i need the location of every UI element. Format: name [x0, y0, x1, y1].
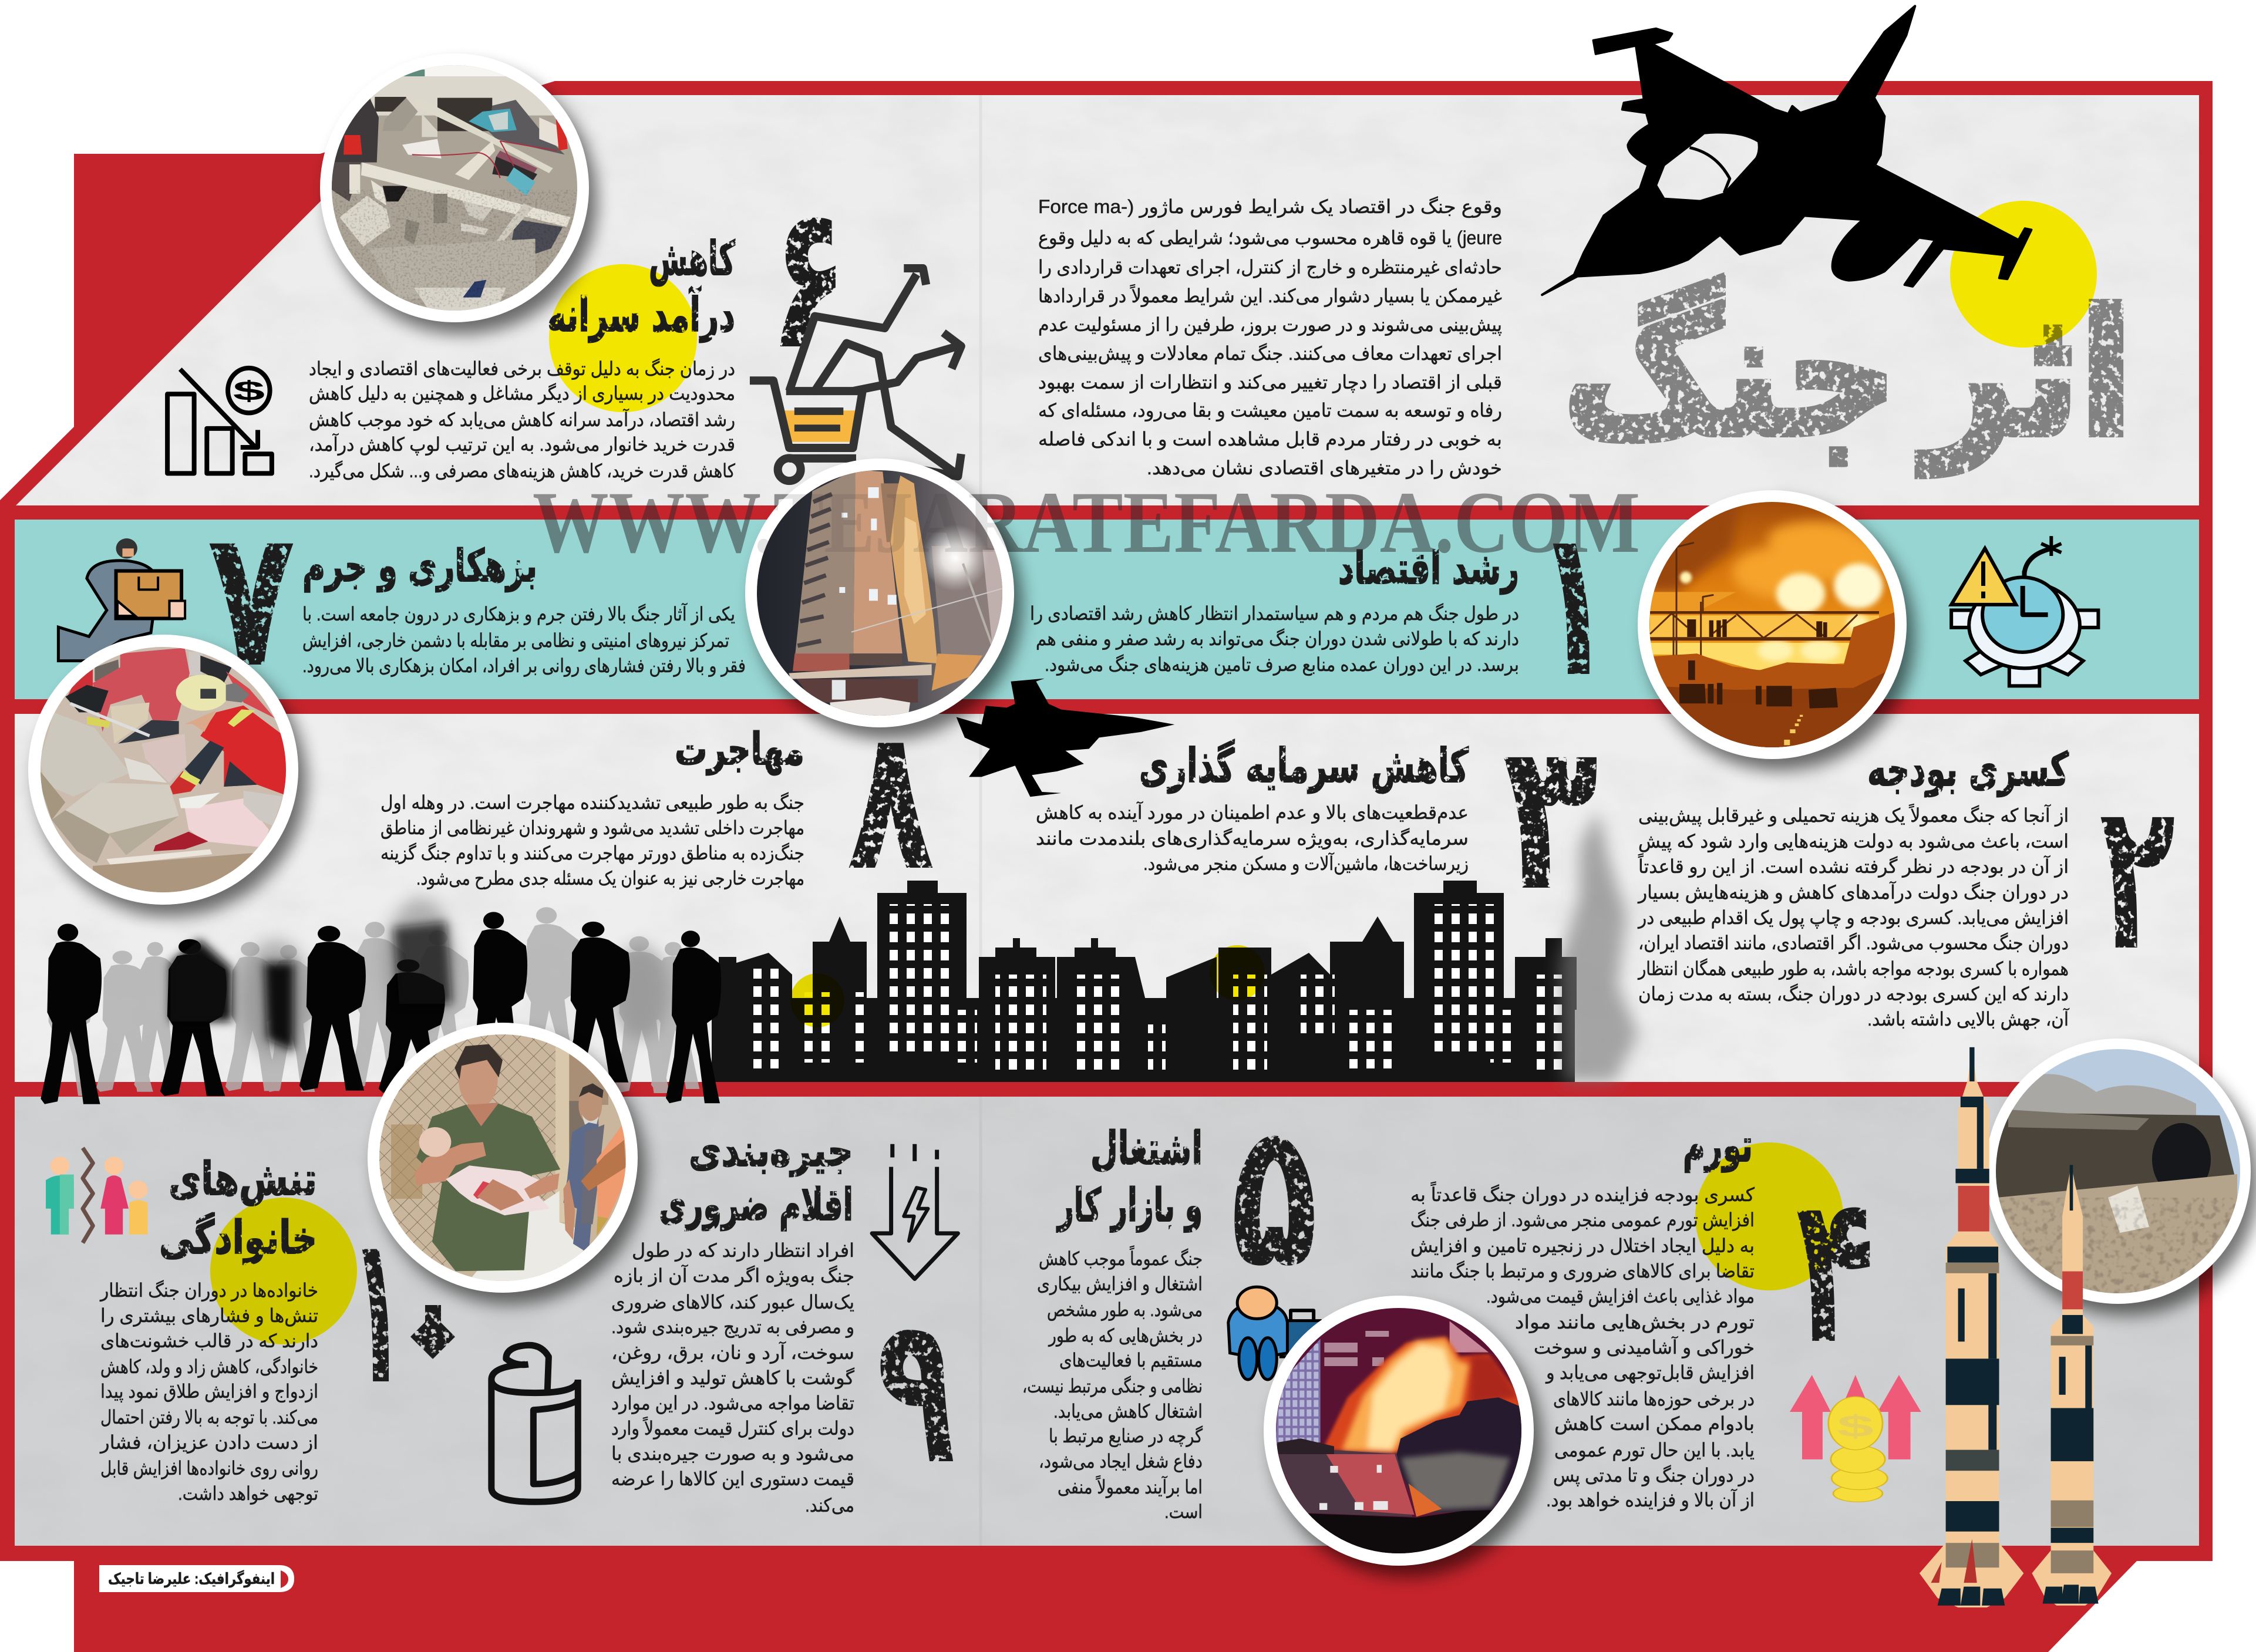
yellow circle: section 6 [549, 264, 697, 412]
section 10 heading: خانوادگی [159, 1212, 317, 1265]
section 4 text: بادوام ممکن است کاهش [1554, 1413, 1755, 1435]
section 10 text: دارند که در قالب خشونت‌های [100, 1330, 318, 1352]
section 5 text: در بخش‌هایی که به طور [1048, 1325, 1203, 1347]
section 4 text: تقاضا برای کالاهای ضروری و مرتبط با جنگ مانند [1410, 1260, 1755, 1282]
section 2 text [1637, 803, 2070, 1030]
rocket: large [1920, 1047, 2023, 1607]
section 4 text: تورم در بخش‌هایی مانند مواد [1515, 1312, 1755, 1333]
icon: down arrow with lightning [872, 1144, 958, 1279]
section 6 text: کاهش قدرت خرید، کاهش هزینه‌های مصرفی و... شکل می‌گیرد. [309, 460, 736, 482]
icon: thief carrying box [58, 538, 185, 661]
section 5 heading: و بازار کار [1056, 1179, 1203, 1232]
section 9 text: یک‌سال عبور کند، کالاهای ضروری [611, 1292, 854, 1313]
section 5 text: جنگ عموماً موجب کاهش [1039, 1245, 1203, 1270]
section 8 text: مهاجرت خارجی نیز به عنوان یک مسئله جدی مطرح می‌شود. [416, 868, 804, 889]
photo: night fire with bridge [1638, 490, 1915, 771]
intro text block: رفاه و توسعه به سمت تامین معیشت و بقا می‌رود، مسئله‌ای که [1038, 400, 1502, 422]
section 10 text: می‌کند. با توجه به بالا رفتن احتمال [100, 1407, 318, 1428]
section 2 text: است، باعث می‌شود به دولت هزینه‌هایی وارد شود که پیش [1638, 831, 2069, 852]
photo: burned tanker [1985, 1039, 2256, 1316]
credit tag [99, 1565, 294, 1592]
section 4 number: ۴ [1796, 1150, 1874, 1390]
section 8 text: جنگ‌زده به مناطق دورتر مهاجرت می‌کنند و با تداوم جنگ گزینه [381, 842, 804, 864]
section 9 text: قیمت دستوری این کالاها را عرضه [611, 1468, 854, 1490]
section 1 text: در طول جنگ هم مردم و هم سیاستمدار انتظار کاهش رشد اقتصادی را [1030, 603, 1519, 625]
section 2 text: افزایش می‌یابد. کسری بودجه و چاپ پول یک اقدام طبیعی در [1637, 907, 2069, 929]
section 6 heading: درآمد سرانه [547, 286, 735, 343]
section 4 text: در دوران جنگ و تا مدتی پس [1553, 1465, 1755, 1486]
section 5 text: است. [1164, 1501, 1203, 1522]
section 6 text: قدرت خرید خانوار می‌شود. به این ترتیب لوپ کاهش درآمد، [309, 433, 735, 456]
credit tag: اینفوگرافیک: علیرضا تاجیک [108, 1570, 275, 1588]
section 2 text: دوران جنگ محسوب می‌شود. اگر اقتصادی، مانند اقتصاد ایران، [1638, 932, 2069, 954]
section 10 heading [159, 1153, 317, 1265]
photo: rubble of destroyed building [320, 53, 597, 334]
skyline [712, 881, 1577, 1082]
section 1 heading: رشد اقتصاد [1338, 542, 1519, 595]
photo: man carrying injured child [368, 1023, 646, 1304]
section 8 heading: مهاجرت [675, 723, 804, 776]
icon: falling chart with dollar: $ [233, 376, 265, 406]
section 2 heading: کسری بودجه [1867, 742, 2069, 797]
intro text block [1038, 196, 1502, 479]
intro text block: قبلی از اقتصاد را دچار تغییر می‌کند و انتظارات از سمت بهبود [1038, 372, 1502, 393]
icon: rising arrows with coins: $ [1837, 1410, 1874, 1443]
section 9 text [611, 1240, 855, 1516]
section 4 text: مواد غذایی باعث افزایش قیمت می‌شود. [1486, 1286, 1755, 1307]
icon: shopping cart with arrows [750, 268, 961, 481]
section 5 text: اما برآیند معمولاً منفی [1058, 1475, 1203, 1498]
watermark under photos: WWW.TEJARATEFARDA.COM [533, 474, 1640, 571]
section 6 text: در زمان جنگ به دلیل توقف برخی فعالیت‌های اقتصادی و ایجاد [309, 358, 735, 380]
section 4 text: کسری بودجه فزاینده در دوران جنگ قاعدتاً به [1410, 1181, 1755, 1206]
section 4 text: از آن بالا و فزاینده خواهد بود. [1546, 1488, 1755, 1511]
section 9 text: گوشت با کاهش تولید و افزایش [611, 1367, 855, 1389]
section 10 text: از دست دادن عزیزان، فشار [99, 1432, 318, 1454]
section 10 number [349, 1188, 461, 1431]
intro text block: غیرممکن یا بسیار دشوار می‌کند. این شرایط معمولاً در قراردادها [1038, 284, 1502, 307]
section 2 number: ۲ [2099, 757, 2176, 996]
section 5 heading [1056, 1122, 1203, 1232]
icon: unemployed man with briefcase [1228, 1287, 1320, 1380]
section 8 text: مهاجرت داخلی تشدید می‌شود و شهروندان غیرنظامی از مناطق [381, 817, 804, 839]
section 4 text: در برخی حوزه‌ها مانند کالاهای [1553, 1388, 1755, 1410]
section 9 text: دولت برای کنترل قیمت معمولاً وارد [611, 1416, 854, 1439]
section 10 text [99, 1280, 318, 1505]
photo: explosion among buildings [1264, 1296, 1542, 1577]
main title: اثر جنگ [1563, 274, 2133, 476]
section 4 heading: تورم [1683, 1120, 1753, 1172]
panel: bottom section background [15, 1097, 2199, 1546]
small fighter jet silhouette [957, 679, 1174, 797]
section 6 heading: کاهش [649, 231, 735, 286]
section 7 text: یکی از آثار جنگ بالا رفتن جرم و بزهکاری در درون جامعه است. با [302, 602, 735, 625]
section 10 text: روانی روی خانواده‌ها افزایش قابل [100, 1458, 318, 1479]
section 5 text: دفاع شغل ایجاد می‌شود، [1039, 1451, 1203, 1472]
section 8 text [381, 792, 804, 889]
icon: family split [46, 1148, 147, 1243]
section 2 text: از آن در بودجه در نظر گرفته نشده است. از این رو قاعدتاً [1638, 853, 2069, 878]
yellow circle: title [1950, 201, 2097, 348]
section 9 heading: جیره‌بندی [689, 1124, 853, 1177]
section 9 text: می‌شود و به صورت جیره‌بندی با [611, 1443, 854, 1465]
section 4 text: افزایش قابل‌توجهی می‌یابد و [1545, 1362, 1755, 1384]
section 2 text: از آنجا که جنگ معمولاً یک هزینه تحمیلی و غیرقابل پیش‌بینی [1638, 803, 2069, 827]
icon: rising arrows with coins [1790, 1375, 1921, 1502]
section 7 text [302, 602, 746, 677]
section 2 text: در دوران جنگ دولت درآمدهای کاهش و هزینه‌هایش بسیار [1637, 881, 2069, 903]
section 5 number: ۵ [1230, 1079, 1318, 1312]
section 1 number: ۱ [1536, 483, 1612, 723]
section 9 text: جنگ به‌ویژه اگر مدت آن از بازه [614, 1264, 854, 1287]
section 9 number: ۹ [876, 1270, 956, 1510]
section 6 number: ۶ [769, 161, 848, 394]
section 9 text: می‌کند. [805, 1495, 854, 1516]
smoke beside skyline [1559, 810, 1638, 1082]
yellow circle: section 10 [210, 1198, 357, 1344]
panel: intro and income section background [16, 95, 2199, 505]
section 1 text [1030, 603, 1519, 676]
section 10 text: تنش‌ها و فشارهای بیشتری را [100, 1305, 318, 1327]
intro text block: حادثه‌ای غیرمنتظره و خارج از کنترل، اجرای تعهدات قراردادی را [1038, 257, 1502, 278]
section 2 text: دارند که این کسری بودجه در دوران جنگ، بسته به مدت زمان [1638, 983, 2069, 1005]
section 6 heading [547, 231, 735, 343]
intro text block: پیش‌بینی می‌شوند و در صورت بروز، طرفین را از مسئولیت عدم [1038, 314, 1502, 336]
panel: middle section background [15, 714, 2199, 1082]
section 5 text: مستقیم با فعالیت‌های [1059, 1350, 1203, 1371]
section 5 text: می‌شود. به طور مشخص [1047, 1299, 1203, 1321]
section 8 text: جنگ به طور طبیعی تشدیدکننده مهاجرت است. در وهله اول [381, 792, 804, 814]
icon: falling chart with dollar [167, 368, 272, 473]
photo: rescue workers [28, 635, 307, 916]
section 6 text: رشد اقتصاد، درآمد سرانه کاهش می‌یابد که خود موجب کاهش [309, 408, 735, 431]
section 7 heading: بزهکاری و جرم [302, 540, 537, 592]
intro text block: اجرای تعهدات معاف می‌کنند. جنگ تمام معادلات و پیش‌بینی‌های [1038, 343, 1502, 365]
intro text block: jeure) یا قوه قاهره محسوب می‌شود؛ شرایطی که به دلیل وقوع [1038, 227, 1502, 249]
section 4 text [1410, 1181, 1755, 1511]
section 9 text: تقاضا مواجه می‌شود. در این موارد [611, 1393, 854, 1414]
section 3 text [1036, 801, 1469, 875]
panel: teal band [15, 520, 2199, 699]
intro text block: به خوبی در رفتار مردم قابل مشاهده است و با اندکی فاصله [1038, 429, 1502, 450]
section 2 text: همواره با کسری بودجه مواجه باشد، به طور طبیعی همگان انتظار [1637, 958, 2069, 980]
section 5 text [1022, 1245, 1203, 1522]
section 4 text: خوراکی و آشامیدنی و سوخت [1534, 1336, 1755, 1358]
section 9 text: سوخت، آرد و نان، برق، روغن، [611, 1341, 854, 1364]
section 5 text: گرچه در صنایع مرتبط با [1049, 1425, 1203, 1447]
section 2 text: آن، جهش بالایی داشته باشد. [1867, 1007, 2070, 1030]
section 5 heading: اشتغال [1090, 1122, 1203, 1175]
section 3 number: ۳ [1502, 697, 1598, 936]
text: ۱۰ [349, 1188, 461, 1431]
section 4 text: افزایش تورم عمومی منجر می‌شود. از طرفی جنگ [1410, 1209, 1755, 1231]
intro text block: وقوع جنگ در اقتصاد یک شرایط فورس ماژور (Force ma-‎ [1038, 196, 1502, 218]
section 5 text: نظامی و جنگی مرتبط نیست، [1022, 1375, 1203, 1397]
section 3 text: عدم‌قطعیت‌های بالا و عدم اطمینان در مورد آینده به کاهش [1036, 801, 1469, 824]
watermark faint overlay on photos: WWW.TEJARATEFARDA.COM [533, 474, 1640, 571]
section 7 text: فقر و بالا رفتن فشارهای روانی بر افراد، امکان بزهکاری بالا می‌رود. [302, 655, 746, 677]
section 10 text: توجهی خواهد داشت. [178, 1483, 318, 1505]
section 9 heading [659, 1124, 853, 1231]
section 10 text: خانوادگی، کاهش زاد و ولد، کاهش [100, 1356, 318, 1378]
section 1 text: برسد. در این دوران عمده منابع صرف تامین هزینه‌های جنگ می‌شود. [1045, 654, 1519, 676]
section 6 text [309, 358, 736, 482]
section 3 text: سرمایه‌گذاری، به‌ویژه سرمایه‌گذاری‌های بلندمدت مانند [1036, 828, 1469, 849]
section 1 text: دارند که با طولانی شدن دوران جنگ می‌تواند به رشد صفر و منفی هم [1036, 628, 1519, 650]
section 9 heading: اقلام ضروری [659, 1178, 853, 1231]
intro text block: خودش را در متغیرهای اقتصادی نشان می‌دهد. [1147, 457, 1502, 479]
section 10 text: ازدواج و افزایش طلاق نمود پیدا [100, 1381, 318, 1402]
section 7 number: ۷ [207, 487, 295, 710]
section 3 heading: کاهش سرمایه گذاری [1139, 739, 1469, 794]
icon: tin can [491, 1345, 578, 1502]
section 9 text: افراد انتظار دارند که در طول [632, 1240, 854, 1262]
section 10 heading: تنش‌های [169, 1153, 317, 1206]
rocket: small [2032, 1165, 2112, 1606]
section 5 text: اشتغال و افزایش بیکاری [1037, 1273, 1203, 1295]
icon: gear clock and bomb warning [1951, 536, 2098, 686]
yellow moons multiplied over skyline [790, 945, 1265, 1027]
yellow circle: section 4 [1695, 1142, 1843, 1290]
photo: damaged tower at night [745, 458, 1022, 739]
section 10 text: خانواده‌ها در دوران جنگ انتظار [99, 1280, 318, 1302]
section 6 text: محدودیت در بسیاری از دیگر مشاغل و همچنین به دلیل کاهش [309, 383, 735, 404]
section 7 text: تمرکز نیروهای امنیتی و نظامی بر مقابله با دشمن خارجی، افزایش [302, 630, 729, 652]
migrant silhouettes [41, 898, 721, 1104]
section 5 text: اشتغال کاهش می‌یابد. [1053, 1401, 1203, 1422]
section 3 text: زیرساخت‌ها، ماشین‌آلات و مسکن منجر می‌شود. [1143, 852, 1469, 875]
section 8 number: ۸ [847, 686, 935, 915]
large fighter jet silhouette [1542, 6, 2031, 295]
section 4 text: به دلیل ایجاد اختلال در زنجیره تامین و افزایش [1410, 1235, 1755, 1257]
section 9 text: و مصرفی به تدریج جیره‌بندی شود. [611, 1316, 854, 1338]
section 4 text: یابد. با این حال تورم عمومی [1554, 1439, 1755, 1461]
